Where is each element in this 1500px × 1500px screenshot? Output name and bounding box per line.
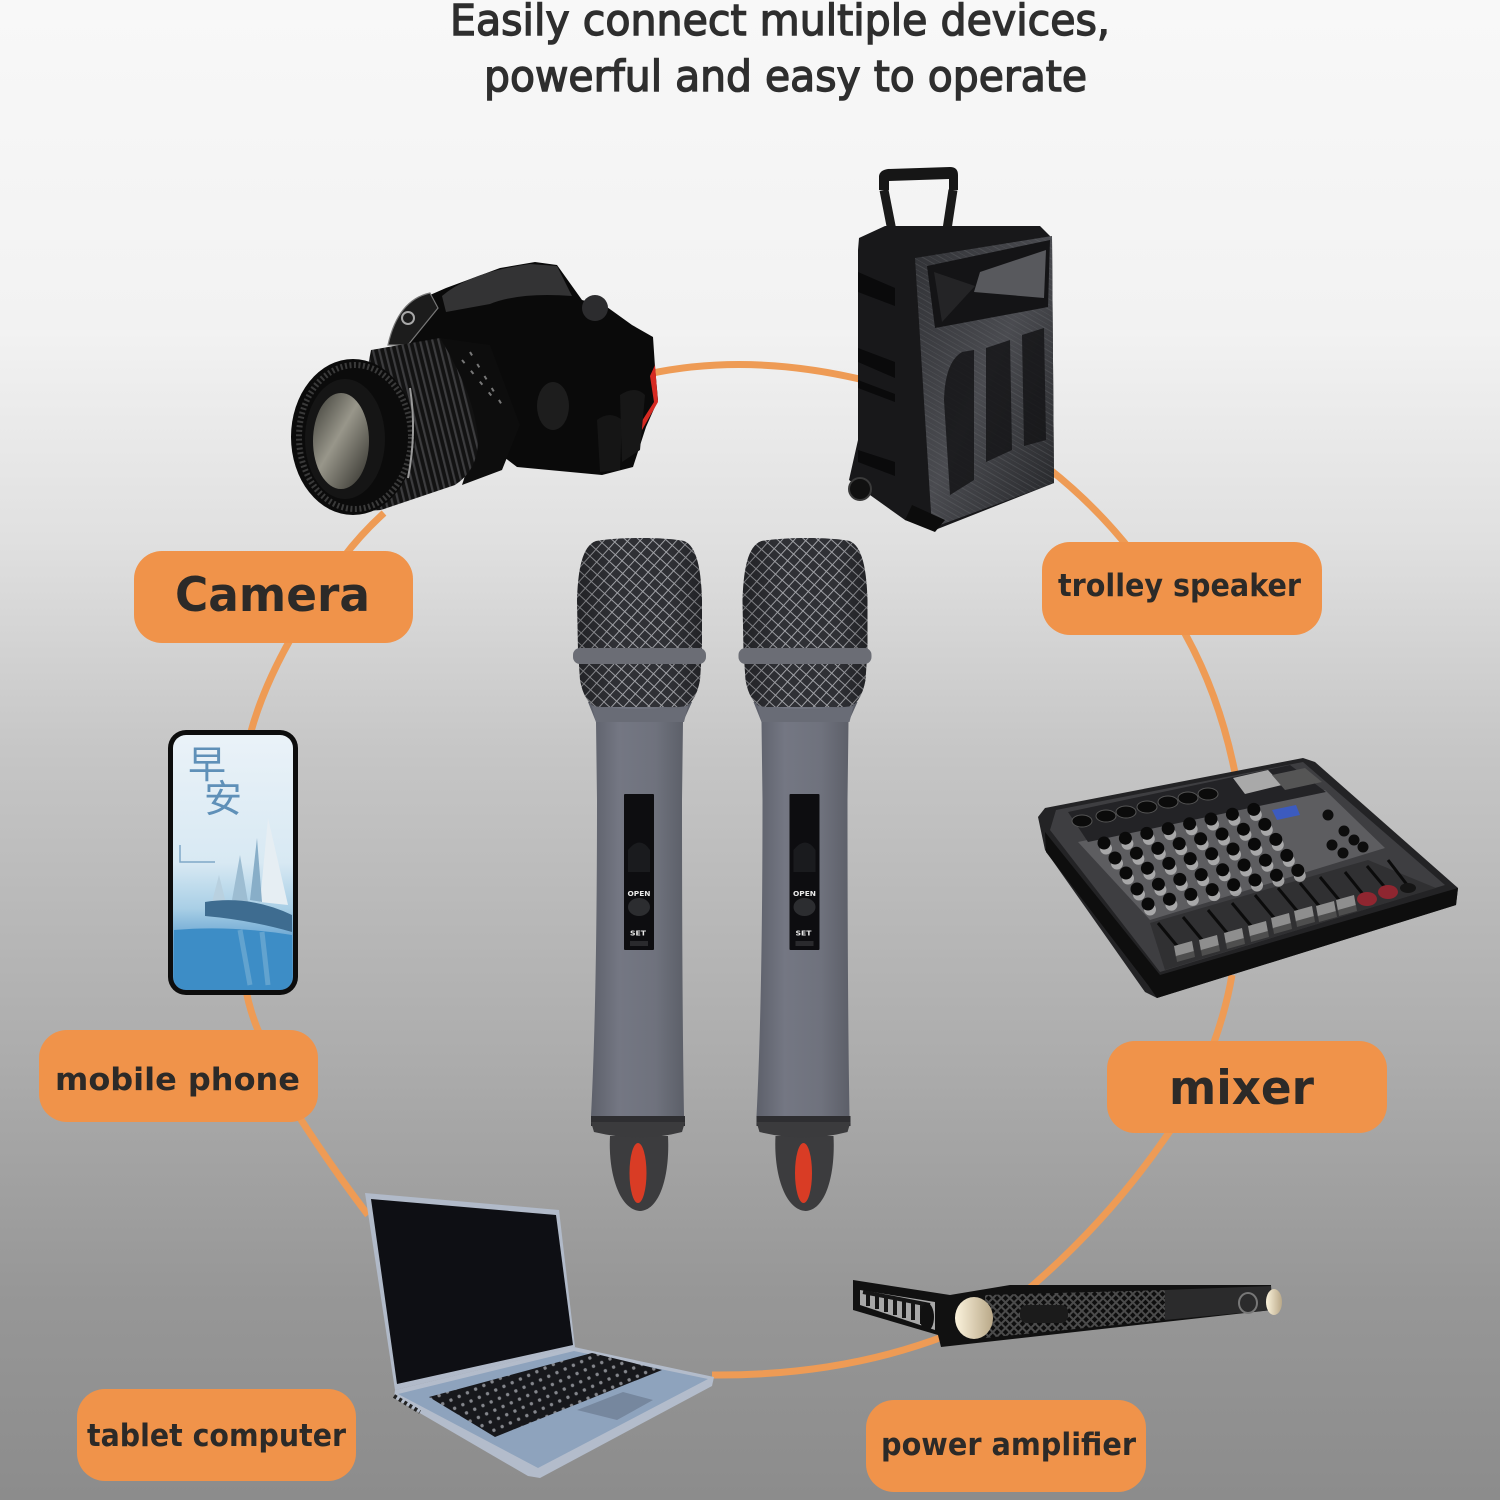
connection ring <box>246 365 1236 1375</box>
icon: mixer <box>1038 758 1458 998</box>
microphone: right: OPEN <box>793 890 816 898</box>
microphone: left: OPEN <box>628 890 651 898</box>
mixer screen <box>1272 805 1300 820</box>
label: mobile phone <box>39 1030 318 1122</box>
phone wallpaper greeting: 安 <box>204 768 242 823</box>
microphone: left: SET <box>630 930 646 938</box>
label: mixer: mixer <box>1169 1061 1315 1116</box>
label: tablet computer <box>77 1389 356 1481</box>
label: trolley speaker <box>1042 542 1322 635</box>
icon: power amplifier <box>853 1280 1282 1347</box>
label: mixer <box>1107 1041 1387 1133</box>
label: power amplifier: power amplifier <box>881 1427 1137 1463</box>
label: trolley speaker: trolley speaker <box>1058 568 1302 604</box>
icon: camera <box>291 262 658 515</box>
title: powerful and easy to operate <box>484 52 1087 102</box>
label: tablet computer: tablet computer <box>87 1418 347 1454</box>
label: Camera <box>134 551 413 643</box>
title <box>450 0 1110 102</box>
icon: laptop <box>365 1193 714 1478</box>
mixer faders <box>1158 860 1416 962</box>
microphone: left <box>573 538 706 1211</box>
mixer XLR sockets <box>1072 788 1218 827</box>
label: power amplifier <box>866 1400 1146 1492</box>
label: Camera: Camera <box>175 568 370 623</box>
icon: mobile phone <box>168 730 298 995</box>
icon: trolley speaker <box>849 167 1054 532</box>
mixer knob grid <box>1098 803 1306 916</box>
microphone: right <box>738 538 872 1211</box>
phone wallpaper greeting: 早 <box>188 734 226 789</box>
label: mobile phone: mobile phone <box>55 1062 300 1098</box>
microphone: right: SET <box>796 930 812 938</box>
phone wallpaper sailboats <box>174 818 292 989</box>
